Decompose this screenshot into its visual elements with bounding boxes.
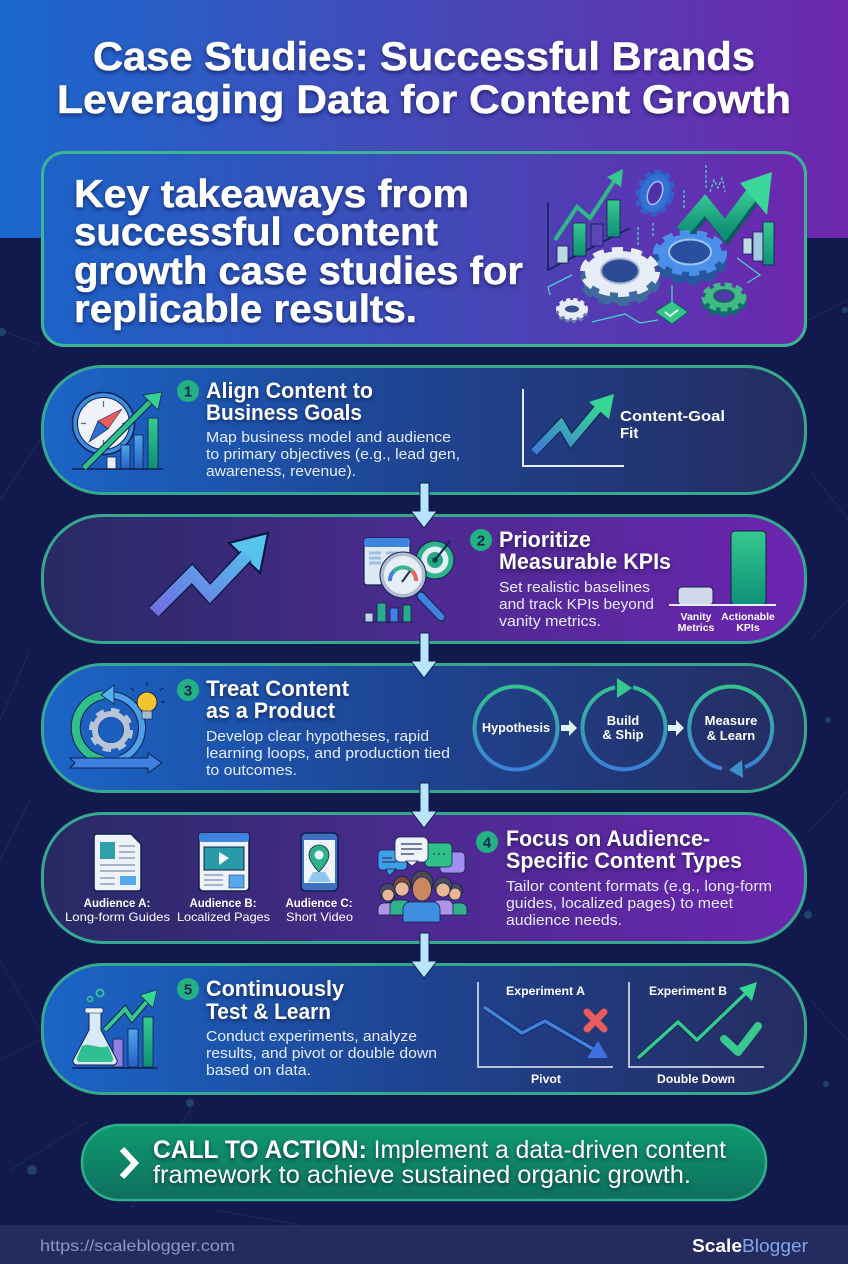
badge 4: 4 (483, 834, 492, 852)
chart: vanity vs actionable KPIs: Metrics (678, 622, 715, 634)
step 4 heading (506, 826, 742, 873)
icon: gear loop and lightbulb (70, 682, 165, 773)
icon: large growth arrow (154, 533, 268, 612)
step 3 description: to outcomes. (206, 762, 297, 779)
step 3 description: learning loops, and production tied (206, 745, 450, 762)
title: Leveraging Data for Content Growth (57, 78, 791, 122)
badge 2: 2 (477, 532, 485, 550)
step 2 heading: Measurable KPIs (499, 549, 671, 574)
step 3 description: Develop clear hypotheses, rapid (206, 728, 429, 745)
key takeaways text (74, 173, 523, 331)
icon: dashboard, target and magnifier (363, 538, 454, 622)
diagram: hypothesis, build and ship, measure and learn: Build (607, 713, 639, 728)
step 5 heading: Test & Learn (206, 999, 331, 1024)
step 5 description: Conduct experiments, analyze (206, 1028, 417, 1045)
icon: chevron (122, 1149, 135, 1177)
audience A: long-form guides (65, 834, 170, 924)
diagram: hypothesis, build and ship, measure and learn: Measure (705, 713, 757, 728)
chart: experiment A pivot: Experiment A (506, 984, 585, 998)
step 5 description (206, 1028, 437, 1079)
chart: experiment B double down: Double Down (657, 1072, 735, 1086)
audience A: long-form guides: Long-form Guides (65, 910, 170, 924)
step 1 description: awareness, revenue). (206, 463, 356, 480)
arrow: step 1 to step 2 (411, 483, 437, 528)
panel: step 5 (42, 964, 806, 1094)
arrow: step 3 to step 4 (411, 783, 437, 828)
icon: compass and growth bars (72, 392, 163, 469)
title (57, 35, 791, 122)
step 1 description: Map business model and audience (206, 429, 451, 446)
key takeaways text: Key takeaways from (74, 173, 469, 216)
step 1 description: to primary objectives (e.g., lead gen, (206, 446, 460, 463)
step 5 heading: Continuously (206, 976, 345, 1001)
step 4 description: Tailor content formats (e.g., long-form (506, 878, 772, 895)
audience C: short video (285, 833, 353, 924)
audience A: long-form guides: Audience A: (84, 898, 150, 910)
badge 3 (177, 679, 199, 701)
step 2 description: and track KPIs beyond (499, 596, 654, 613)
step 3 description (206, 728, 450, 779)
chart: experiment A pivot: Pivot (531, 1072, 561, 1086)
step 1 heading: Business Goals (206, 400, 362, 425)
footer url: https://scaleblogger.com (40, 1238, 235, 1255)
step 3 heading: Treat Content (206, 676, 350, 701)
step 3 heading (206, 676, 350, 723)
step 4 description: guides, localized pages) to meet (506, 895, 734, 912)
chart: vanity vs actionable KPIs: KPIs (736, 622, 760, 634)
step 5 description: based on data. (206, 1062, 311, 1079)
key takeaways text: growth case studies for (74, 250, 523, 293)
badge 4 (476, 831, 498, 853)
step 2 description: Set realistic baselines (499, 579, 650, 596)
panel: step 4 (42, 814, 806, 942)
chart: experiment A pivot (478, 982, 613, 1086)
chart: experiment B double down: Experiment B (649, 984, 727, 998)
step 3 heading: as a Product (206, 698, 336, 723)
panel: step 1 (42, 366, 806, 494)
panel: key takeaways (42, 152, 806, 346)
chart: vanity vs actionable KPIs (669, 531, 776, 634)
diagram: hypothesis, build and ship, measure and learn: & Learn (707, 728, 755, 743)
step 2 description (499, 579, 654, 630)
step 4 description (506, 878, 772, 929)
chart: content-goal fit: Content-Goal (620, 408, 725, 425)
step 4 description: audience needs. (506, 912, 622, 929)
step 4 heading: Focus on Audience- (506, 826, 710, 851)
step 1 heading (206, 378, 373, 425)
footer (0, 1225, 848, 1264)
call to action text: CALL TO ACTION: Implement a data-driven content (153, 1136, 726, 1164)
chart: vanity vs actionable KPIs: Actionable (721, 611, 775, 623)
step 2 description: vanity metrics. (499, 613, 601, 630)
key takeaways text: successful content (74, 211, 438, 254)
step 4 heading: Specific Content Types (506, 848, 742, 873)
chart: vanity vs actionable KPIs: Vanity (681, 611, 712, 623)
badge 1 (177, 380, 199, 402)
icon: audience group with speech bubbles (378, 837, 467, 922)
diagram: hypothesis, build and ship, measure and learn (474, 678, 772, 778)
audience C: short video: Short Video (286, 910, 353, 924)
badge 5: 5 (184, 982, 192, 998)
step 5 heading (206, 976, 345, 1024)
icon: gears and growth charts (548, 165, 774, 324)
audience B: localized pages (177, 833, 270, 924)
diagram: hypothesis, build and ship, measure and learn: Hypothesis (482, 720, 550, 735)
chart: content-goal fit: Fit (620, 425, 638, 442)
step 1 description (206, 429, 460, 480)
audience C: short video: Audience C: (285, 898, 353, 910)
arrow: step 4 to step 5 (411, 933, 437, 978)
badge 3: 3 (184, 682, 192, 700)
step 1 heading: Align Content to (206, 378, 373, 403)
step 5 description: results, and pivot or double down (206, 1045, 437, 1062)
audience B: localized pages: Localized Pages (177, 910, 270, 924)
icon: flask with growth bars (72, 990, 158, 1068)
panel: step 2 (42, 516, 806, 642)
badge 5 (177, 978, 199, 1000)
diagram: hypothesis, build and ship, measure and learn: & Ship (602, 727, 644, 742)
arrow: step 2 to step 3 (411, 633, 437, 678)
title: Case Studies: Successful Brands (93, 35, 755, 79)
audience B: localized pages: Audience B: (189, 898, 257, 910)
chart: experiment B double down (629, 982, 764, 1086)
badge 1: 1 (184, 384, 192, 400)
call to action (82, 1125, 766, 1200)
step 2 heading: Prioritize (499, 527, 591, 552)
step 2 heading (499, 527, 671, 574)
badge 2 (470, 529, 492, 551)
footer logo: ScaleBlogger (692, 1236, 808, 1256)
call to action text (153, 1136, 726, 1189)
call to action text: framework to achieve sustained organic growth. (153, 1161, 691, 1189)
key takeaways text: replicable results. (74, 288, 417, 331)
chart: content-goal fit (523, 389, 725, 466)
panel: step 3 (42, 664, 806, 792)
